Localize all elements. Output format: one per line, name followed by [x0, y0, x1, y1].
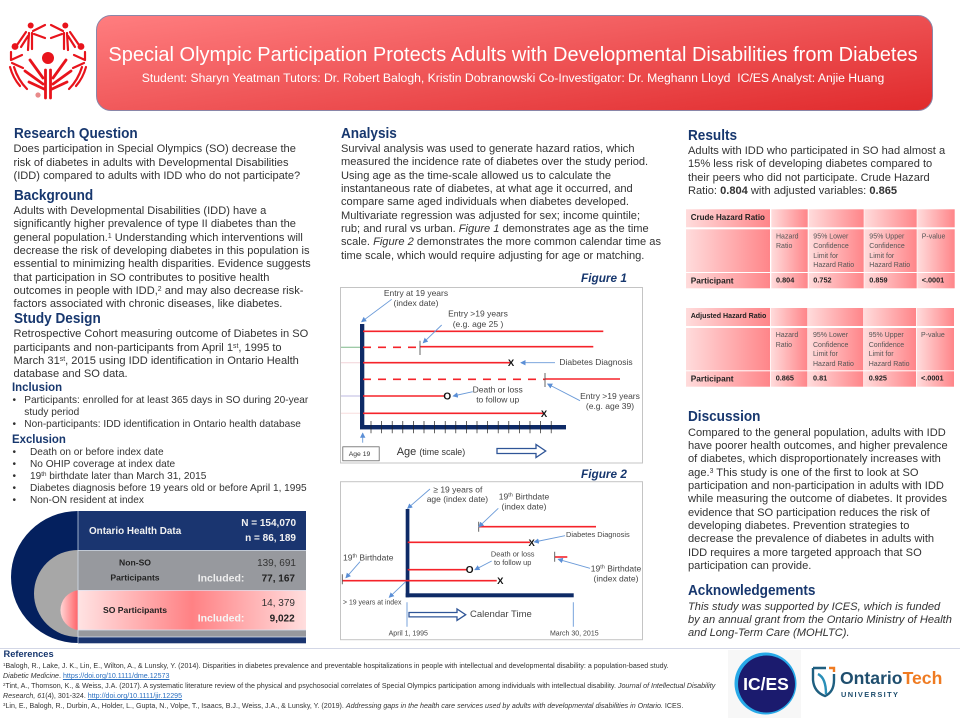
table: adjusted hazard ratio: Adjusted Hazard Ratio	[691, 312, 767, 320]
annotation labels: Birthdate	[513, 491, 549, 501]
logo: Special Olympics	[8, 22, 88, 100]
annotation labels: (e.g. age 39)	[586, 401, 634, 411]
text: background: decrease the risk of developing diabetes in this population is	[14, 245, 310, 257]
heading: Analysis: Analysis	[341, 125, 397, 142]
follow-up lines	[342, 527, 596, 581]
annotation labels: (e.g. age 25 )	[453, 319, 503, 329]
list: exclusion criteria: Non-ON resident at index	[30, 495, 144, 506]
text: analysis: scale. Figure 2 demonstrates the more common calendar time as	[341, 236, 661, 248]
list: exclusion criteria: Diabetes diagnosis before 19 years old or before April 1, 1995	[30, 483, 307, 494]
list: exclusion criteria: •	[12, 471, 16, 482]
text: study design: participants and non-participants from April 1st, 1995 to	[14, 342, 282, 354]
tier: SO participants	[103, 598, 295, 625]
table: adjusted hazard ratio: 0.925	[869, 374, 887, 383]
annotation labels: age (index date)	[427, 494, 488, 504]
event markers: O	[443, 392, 451, 402]
text: references: 1Balogh, R., Lake, J. K., Lin, E., Wilton, A., & Lunsky, Y. (2014). Disparities in diabetes prevalence and preventable hospitalizations in people with intellectual and developmental disability: a population-based study.	[3, 662, 669, 670]
list: exclusion criteria: 19th birthdate later than March 31, 2015	[30, 471, 206, 482]
text: background: essential to minimizing health disparities. Evidence suggests	[14, 258, 311, 270]
annotation labels: > 19 years at index	[343, 599, 402, 606]
text: discussion: participation and non-participation in adults with IDD	[688, 480, 944, 492]
annotation labels: Birthdate	[357, 552, 394, 562]
annotation arrows	[346, 489, 590, 627]
annotation labels: th	[600, 564, 605, 570]
text: analysis: instantaneous rate of diabetes, at what age it occurred, and	[341, 183, 633, 195]
text: analysis: time scale, which would require adjusting for age or matching.	[341, 250, 644, 262]
banner: poster title	[96, 14, 933, 110]
table: adjusted hazard ratio	[686, 308, 954, 387]
table: crude hazard ratio: 95% Lower	[813, 234, 849, 240]
logo: IC/ES: IC/ES	[743, 674, 789, 694]
annotation labels: ≥ 19 years of	[433, 484, 483, 494]
tier: Ontario Health Data: N = 154,070	[241, 518, 296, 529]
list: exclusion criteria: •	[12, 447, 16, 458]
table: adjusted hazard ratio: Hazard Ratio	[869, 361, 910, 368]
text: study design: database and SO data.	[14, 368, 128, 380]
event markers: X	[508, 358, 515, 369]
table: adjusted hazard ratio: Ratio	[776, 342, 792, 349]
annotation labels: April 1, 1995	[389, 630, 428, 637]
annotation labels: March 30, 2015	[550, 630, 599, 637]
text: results	[688, 145, 946, 197]
text: results: their peers who did not participate. Crude Hazard	[688, 172, 930, 184]
text: research question: Does participation in Special Olympics (SO) decrease the	[14, 143, 296, 155]
table: crude hazard ratio: Confidence	[869, 243, 905, 250]
table: crude hazard ratio: Limit for	[869, 253, 895, 260]
annotation labels: (index date)	[502, 501, 547, 511]
text: study design: March 31st, 2015 using IDD identification in Ontario Health	[14, 355, 299, 367]
annotation labels: 19	[499, 491, 508, 501]
heading: Inclusion: Inclusion	[12, 380, 62, 394]
annotation labels: th	[352, 553, 357, 559]
list: exclusion criteria: •	[12, 483, 16, 494]
figure label: Figure 1: Figure 1	[581, 271, 627, 285]
text: analysis: Using age as the time-scale allowed us to calculate the	[341, 170, 611, 182]
annotation labels: Entry >19 years	[448, 309, 508, 319]
text: background: significantly higher prevalence of type II diabetes than the	[14, 218, 296, 230]
heading: Results: Results	[688, 127, 737, 144]
annotation labels: Death or loss	[491, 549, 535, 558]
list: inclusion criteria	[12, 395, 308, 430]
tier: Ontario Health Data	[89, 518, 296, 544]
table: crude hazard ratio: 0.804	[776, 276, 795, 285]
table: adjusted hazard ratio: <.0001	[921, 374, 944, 383]
figure label: Figure 2: Figure 2	[581, 467, 627, 481]
follow-up lines	[363, 331, 620, 413]
heading: Research Question: Research Question	[14, 125, 138, 142]
annotation labels: 19	[591, 563, 600, 573]
table: crude hazard ratio: <.0001	[922, 276, 944, 285]
annotation labels: (index date)	[594, 573, 639, 583]
authors: Student: Sharyn Yeatman Tutors: Dr. Robert Balogh, Kristin Dobranowski Co-Investigator: Dr. Meghann Lloyd IC/ES Analyst: Anjie Huang	[142, 71, 884, 85]
table: crude hazard ratio	[686, 209, 955, 288]
arrow: calendar time	[409, 609, 466, 620]
list: inclusion criteria: •	[12, 395, 16, 406]
logo: Ontario Tech University	[812, 666, 942, 699]
table: adjusted hazard ratio: 0.81	[813, 374, 827, 383]
logo: Ontario Tech University: UNIVERSITY	[841, 690, 899, 699]
annotation arrows	[362, 299, 580, 443]
annotation labels: 19	[343, 552, 352, 562]
text: research question: risk of diabetes in adults with Developmental Disabilities	[14, 157, 289, 169]
table: adjusted hazard ratio: P-value	[921, 332, 945, 339]
text: discussion: evidence that SO participation reduces the risk of	[688, 507, 930, 519]
text: background: that participation in SO contributes to positive health	[14, 272, 269, 284]
axis label: age: Age (time scale)	[397, 446, 465, 458]
list: inclusion criteria: Non-participants: IDD identification in Ontario health database	[24, 419, 301, 430]
event markers: X	[529, 538, 536, 549]
table: crude hazard ratio: Ratio	[776, 243, 792, 250]
list: exclusion criteria: Death on or before index date	[30, 447, 164, 458]
annotation labels	[343, 484, 641, 637]
text: analysis: measured the incidence rate of diabetes over the study period.	[341, 156, 648, 168]
tier: SO participants: 14, 379	[262, 598, 295, 609]
text: references: Diabetic Medicine. https://doi.org/10.1111/dme.12573	[3, 672, 169, 680]
list: inclusion criteria: Participants: enrolled for at least 365 days in SO during 20-year	[24, 395, 308, 406]
text: analysis: rub; and rural vs urban. Figure 1 demonstrates age as the time	[341, 223, 649, 235]
event markers: X	[541, 409, 548, 420]
text: background: general population.1 Understanding which interventions will	[14, 232, 303, 244]
text: research question	[14, 143, 300, 182]
heading: Discussion: Discussion	[688, 408, 760, 425]
text: analysis: Multivariate regression was adjusted for sex; income quintile;	[341, 210, 640, 222]
axis label: calendar time: Calendar Time	[470, 609, 532, 620]
annotation labels: to follow up	[494, 558, 531, 567]
text: discussion: developing diabetes. Prevention strategies to	[688, 520, 909, 532]
table: adjusted hazard ratio: Participant	[691, 374, 734, 384]
tier: Non-SO participants: Included:	[198, 573, 244, 585]
list: exclusion criteria	[12, 447, 307, 506]
text: discussion: decrease the prevalence of diabetes in adults with	[688, 533, 934, 545]
wordmark: OntarioTech	[840, 668, 942, 688]
text: background: Adults with Developmental Disabilities (IDD) have a	[14, 205, 266, 217]
text: results: Ratio: 0.804 with adjusted variables: 0.865	[688, 185, 897, 197]
table: crude hazard ratio: 0.859	[869, 276, 888, 285]
text: discussion: IDD requires a more targeted approach that SO	[688, 547, 922, 559]
text: discussion: of diabetes, which disproportionately increases with	[688, 453, 941, 465]
tier: Non-SO participants	[110, 558, 296, 585]
table: adjusted hazard ratio: Hazard Ratio	[813, 361, 854, 368]
table: crude hazard ratio: Hazard Ratio	[813, 262, 854, 269]
table: crude hazard ratio: Crude Hazard Ratio	[691, 213, 765, 222]
table: adjusted hazard ratio: Limit for	[869, 351, 894, 358]
text: acknowledgements: This study was supported by ICES, which is funded	[688, 601, 940, 613]
table: crude hazard ratio: 0.752	[813, 276, 832, 285]
heading: Acknowledgements: Acknowledgements	[688, 582, 815, 599]
tier: SO participants: SO Participants	[103, 605, 167, 615]
tier: Non-SO participants: 139, 691	[257, 558, 296, 569]
text: discussion: participation can provide.	[688, 560, 811, 572]
logo: IC/ES	[734, 652, 796, 714]
text: references	[3, 662, 716, 710]
table: crude hazard ratio: P-value	[922, 234, 946, 240]
table: adjusted hazard ratio: 0.865	[776, 374, 794, 383]
tier: SO participants: 9,022	[270, 614, 295, 625]
table: crude hazard ratio: Limit for	[813, 253, 839, 260]
annotation labels: to follow up	[476, 395, 519, 405]
table: adjusted hazard ratio: Limit for	[813, 351, 839, 358]
table: adjusted hazard ratio: Confidence	[813, 342, 849, 349]
list: inclusion criteria: •	[12, 419, 16, 430]
heading: Study Design: Study Design	[14, 310, 101, 327]
text: discussion	[688, 427, 948, 572]
text: background: outcomes in people with IDD,2 and may also decrease risk-	[14, 285, 303, 297]
text: references: Research, 61(4), 301-324. http://doi.org/10.1111/jir.12295	[3, 692, 182, 700]
heading: Exclusion: Exclusion	[12, 432, 66, 446]
table: crude hazard ratio: Hazard Ratio	[869, 262, 910, 269]
table: crude hazard ratio: Participant	[691, 276, 734, 286]
text: discussion: while measuring the outcome of diabetes. It provides	[688, 493, 947, 505]
text: study design: Retrospective Cohort measuring outcome of Diabetes in SO	[14, 328, 308, 340]
text: discussion: Compared to the general population, adults with IDD	[688, 427, 946, 439]
annotation labels: Birthdate	[605, 563, 641, 573]
event markers: O	[466, 565, 474, 576]
list: exclusion criteria: No OHIP coverage at index date	[30, 459, 175, 470]
text: discussion: have poorer health outcomes, and higher prevalence	[688, 440, 948, 452]
list: inclusion criteria: study period	[24, 407, 79, 418]
text: results: Adults with IDD who participated in SO had almost a	[688, 145, 945, 157]
title: Special Olympic Participation Protects Adults with Developmental Disabilities from Diabetes	[108, 44, 918, 66]
list: exclusion criteria: •	[12, 495, 16, 506]
chart: Figure 1 age time scale	[340, 287, 643, 464]
text: acknowledgements: by an annual grant from the Ontario Ministry of Health	[688, 614, 952, 626]
table: adjusted hazard ratio: Confidence	[869, 342, 904, 349]
text: references: 3Lin, E., Balogh, R., Durbin, A., Holder, L., Gupta, N., Volpe, T., Isaacs, B.J., Weiss, J.A., & Lunsky, Y. (2019). Addressing gaps in the health care services used by adults with developmental disabilities in Ontario. ICES.	[3, 702, 683, 710]
text: analysis: Survival analysis was used to generate hazard ratios, which	[341, 143, 635, 155]
arrow: time direction	[497, 444, 546, 458]
text: acknowledgements: and Long-Term Care (MOHLTC).	[688, 627, 850, 639]
table: crude hazard ratio: Hazard	[776, 234, 799, 240]
event markers: X	[497, 576, 504, 587]
annotation labels: Death or loss	[473, 385, 523, 395]
text: references: 2Tint, A., Thomson, K., & Weiss, J.A. (2017). A systematic literature review of the physical and psychosocial correlates of Special Olympics participation among individuals with intellectual disability. Journal of Intellectual Disability	[3, 682, 715, 690]
axes	[360, 324, 566, 429]
text: results: 15% less risk of developing diabetes compared to	[688, 158, 932, 170]
table: adjusted hazard ratio: 95% Lower	[813, 332, 849, 339]
text: background: factors associated with chronic diseases, like diabetes.	[14, 298, 282, 310]
annotation labels: Diabetes Diagnosis	[559, 357, 633, 367]
annotation labels: (index date)	[394, 298, 439, 308]
annotation labels: Entry >19 years	[580, 391, 640, 401]
tier: Non-SO participants: Participants	[110, 573, 160, 583]
icon: shield	[813, 668, 834, 696]
text: discussion: age.3 This study is one of the first to look at SO	[688, 467, 919, 479]
table: adjusted hazard ratio: 95% Upper	[869, 332, 904, 339]
annotation labels: Diabetes Diagnosis	[566, 530, 630, 539]
text: analysis: compare same aged individuals when diabetes developed.	[341, 196, 629, 208]
diagram: nested cohort funnel	[11, 511, 306, 644]
box: Age 19: Age 19	[349, 451, 370, 458]
event markers	[443, 358, 548, 420]
list: exclusion criteria: •	[12, 459, 16, 470]
axes	[406, 509, 574, 597]
annotation labels: Entry at 19 years	[384, 288, 448, 298]
tier: Ontario Health Data: n = 86, 189	[245, 533, 296, 544]
table: crude hazard ratio: Confidence	[813, 243, 849, 250]
tier: Non-SO participants: 77, 167	[262, 574, 295, 585]
text: research question: (IDD) compared to adults with IDD who do not participate?	[14, 170, 300, 182]
text: acknowledgements	[688, 601, 952, 639]
heading: References: References	[4, 649, 54, 659]
tier: Ontario Health Data: Ontario Health Data	[89, 526, 182, 537]
box: Age 19	[343, 447, 379, 461]
annotation labels: th	[508, 492, 513, 498]
event markers	[466, 538, 536, 587]
tier: Non-SO participants: Non-SO	[119, 558, 151, 568]
text: analysis	[341, 143, 661, 262]
chart: Figure 2 calendar time scale	[340, 481, 643, 640]
heading: Background: Background	[14, 187, 93, 204]
text: background	[14, 205, 311, 310]
tier: SO participants: Included:	[198, 613, 244, 625]
table: crude hazard ratio: 95% Upper	[869, 234, 905, 240]
text: study design	[14, 328, 308, 380]
table: adjusted hazard ratio: Hazard	[776, 332, 798, 339]
annotation labels	[384, 288, 640, 411]
